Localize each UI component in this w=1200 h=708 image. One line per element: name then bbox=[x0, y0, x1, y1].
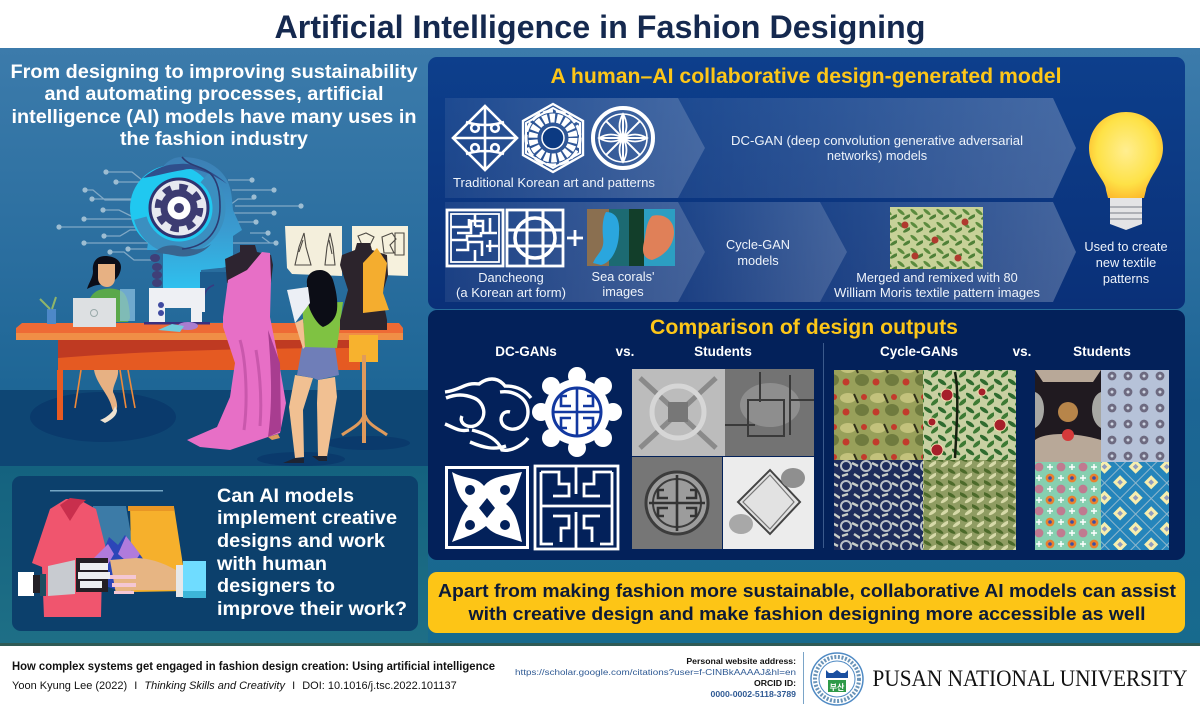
label: Dancheong: Dancheong bbox=[478, 270, 544, 285]
circuit lines bbox=[59, 172, 301, 260]
icon: clothes rack and handshake bbox=[18, 490, 206, 617]
callout bbox=[428, 572, 1185, 633]
label: Dancheong bbox=[456, 270, 566, 300]
icon: light bulb bbox=[1089, 112, 1163, 230]
icon: Korean wheel pattern bbox=[593, 108, 653, 168]
question text: designs and work bbox=[217, 530, 385, 552]
Cycle-GAN label: models bbox=[737, 253, 779, 268]
student gray tiles bbox=[632, 369, 814, 549]
intro text: and automating processes, artificial bbox=[44, 84, 384, 105]
seated woman bbox=[75, 256, 135, 423]
question text bbox=[216, 485, 407, 620]
label: merged bbox=[834, 270, 1040, 300]
footer: contact: 0000-0002-5118-3789 bbox=[710, 689, 796, 699]
column headers bbox=[495, 344, 1131, 359]
Cycle-GAN label bbox=[726, 237, 790, 268]
laptop bbox=[73, 289, 135, 327]
footer: contact: ORCID ID: bbox=[754, 678, 796, 688]
pencil cup bbox=[40, 297, 56, 324]
callout: with creative design and make fashion designing more accessible as well bbox=[467, 603, 1146, 624]
floor bbox=[0, 390, 428, 466]
footer: contact bbox=[515, 656, 796, 699]
icon: Korean hexagon pattern bbox=[523, 104, 583, 172]
question text: improve their work? bbox=[217, 598, 407, 620]
label: Dancheong: (a Korean art form) bbox=[456, 285, 566, 300]
label: Traditional Korean art and patterns bbox=[453, 175, 655, 190]
label: merged: William Moris textile pattern images bbox=[834, 285, 1040, 300]
logo: Pusan National University: 부산 bbox=[830, 682, 845, 692]
column headers: Cycle-GANs bbox=[880, 344, 958, 359]
icon: Dancheong squares bbox=[447, 210, 563, 266]
panel: question bbox=[12, 476, 418, 631]
gear icon bbox=[150, 179, 208, 237]
panel: comparison bbox=[428, 310, 1185, 560]
arrow row 2 bbox=[445, 202, 1076, 302]
callout: Apart from making fashion more sustainable, collaborative AI models can assist bbox=[438, 580, 1177, 601]
DC-GAN label: DC-GAN (deep convolution generative adversarial bbox=[731, 133, 1023, 148]
illustration: fashion studio with AI head bbox=[0, 152, 428, 466]
column headers: Students bbox=[694, 344, 752, 359]
column headers: vs. bbox=[616, 344, 634, 359]
DC-GAN label bbox=[731, 133, 1023, 163]
sketch boards bbox=[285, 226, 408, 276]
label: new patterns bbox=[1084, 239, 1168, 286]
intro text: intelligence (AI) models have many uses in bbox=[12, 107, 416, 128]
title: Artificial Intelligence in Fashion Designing bbox=[274, 9, 926, 45]
intro text: From designing to improving sustainability bbox=[10, 62, 418, 83]
label: new patterns: new textile bbox=[1096, 255, 1156, 270]
panel heading: Comparison of design outputs bbox=[650, 315, 958, 339]
AI head bbox=[123, 152, 242, 322]
label: merged: Merged and remixed with 80 bbox=[856, 270, 1018, 285]
label: sea corals: Sea corals' bbox=[592, 269, 654, 284]
DC-GAN medallion motif bbox=[532, 367, 622, 457]
intro text: the fashion industry bbox=[120, 129, 308, 150]
floor shadows bbox=[30, 392, 410, 466]
arrow row 1 bbox=[445, 98, 1076, 198]
dress form with yellow garment bbox=[340, 243, 389, 443]
question text: Can AI models bbox=[217, 485, 354, 507]
icon: Korean diamond pattern bbox=[453, 106, 517, 170]
student textile tiles bbox=[1035, 370, 1169, 550]
column headers: DC-GANs bbox=[495, 344, 557, 359]
DC-GAN cloud motif bbox=[445, 379, 531, 450]
column headers: Students bbox=[1073, 344, 1131, 359]
DC-GAN maze motif bbox=[535, 466, 618, 549]
image: sea corals bbox=[587, 209, 675, 266]
Cycle-GAN label: Cycle-GAN bbox=[726, 237, 790, 252]
intro text bbox=[10, 62, 418, 150]
footer: citation bbox=[12, 660, 495, 692]
panel: human–AI model bbox=[428, 57, 1185, 309]
table bbox=[16, 323, 403, 420]
label: new patterns: Used to create bbox=[1084, 239, 1168, 254]
label: new patterns: patterns bbox=[1103, 271, 1149, 286]
lower teal band bbox=[0, 465, 428, 645]
sewing machine bbox=[144, 288, 210, 332]
standing woman bbox=[283, 270, 343, 463]
footer: contact: https://scholar.google.com/citations?user=f-CINBkAAAAJ&hl=en bbox=[515, 667, 796, 677]
plus sign bbox=[567, 230, 583, 246]
panel heading: A human–AI collaborative design-generated model bbox=[550, 64, 1062, 88]
footer: contact: Personal website address: bbox=[686, 656, 796, 666]
column headers: vs. bbox=[1013, 344, 1031, 359]
logo: Pusan National University bbox=[811, 653, 863, 705]
DC-GAN label: networks) models bbox=[827, 148, 927, 163]
label: sea corals bbox=[592, 269, 654, 299]
pink dress on mannequin bbox=[187, 245, 286, 450]
question text: designers to bbox=[217, 575, 335, 597]
question text: implement creative bbox=[217, 507, 397, 529]
label: sea corals: images bbox=[602, 284, 644, 299]
footer: citation: How complex systems get engaged in fashion design creation: Using artificial intelligence bbox=[12, 660, 495, 673]
DC-GAN square motif bbox=[445, 466, 529, 549]
footer: citation: Yoon Kyung Lee (2022) I Thinking Skills and Creativity I DOI: 10.1016/j.tsc.2022.101137 bbox=[12, 680, 457, 692]
Cycle-GAN textile tiles bbox=[834, 370, 1016, 550]
image: William Morris textile bbox=[890, 207, 983, 269]
question text: with human bbox=[216, 553, 327, 575]
